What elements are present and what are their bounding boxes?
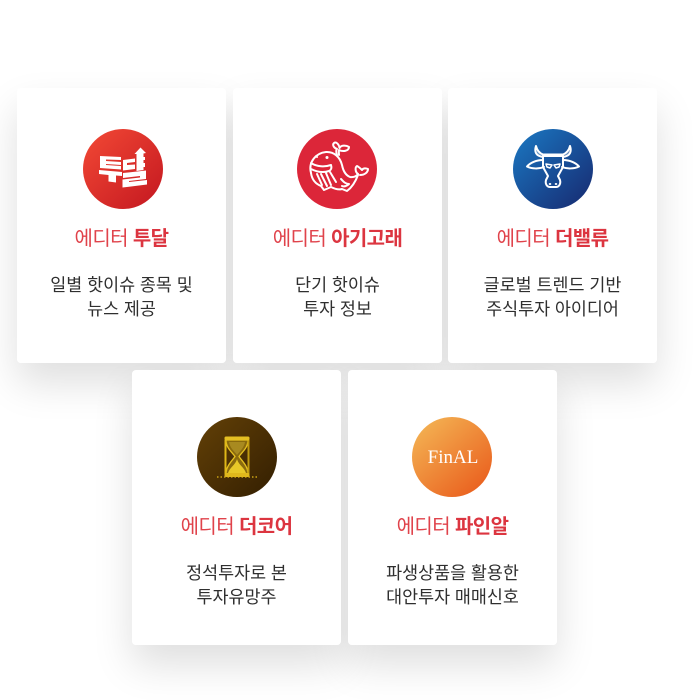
icon: 투달 logo: [83, 129, 163, 209]
description: 정석투자로 본: [186, 563, 287, 583]
card: 에디터 투달: [17, 88, 226, 363]
description: [295, 275, 380, 319]
card: 에디터 더코어: [132, 370, 341, 645]
description: 단기 핫이슈: [295, 275, 380, 295]
heading: 에디터 아기고래: [273, 228, 402, 250]
description: [386, 563, 519, 607]
icon: hourglass: [197, 417, 277, 497]
icon: FinAL logo: [412, 417, 492, 497]
icon: bull: [513, 129, 593, 209]
description: 투자 정보: [303, 299, 372, 319]
heading: 에디터 투달: [75, 228, 168, 250]
heading: 에디터 파인알: [397, 516, 508, 538]
heading: 에디터 더밸류: [497, 228, 608, 250]
description: 일별 핫이슈 종목 및: [50, 275, 193, 295]
description: 주식투자 아이디어: [486, 299, 619, 319]
description: 뉴스 제공: [87, 299, 156, 319]
description: [186, 563, 287, 607]
card: 에디터 아기고래: [233, 88, 442, 363]
card: 에디터 파인알: [348, 370, 557, 645]
description: [50, 275, 193, 319]
description: 글로벌 트렌드 기반: [484, 275, 621, 295]
icon: whale: [297, 129, 377, 209]
heading: 에디터 더코어: [181, 516, 292, 538]
description: 대안투자 매매신호: [386, 587, 519, 607]
icon: FinAL logo: FinAL: [428, 447, 478, 468]
description: 파생상품을 활용한: [386, 563, 519, 583]
description: 투자유망주: [196, 587, 276, 607]
description: [484, 275, 621, 319]
card: 에디터 더밸류: [448, 88, 657, 363]
